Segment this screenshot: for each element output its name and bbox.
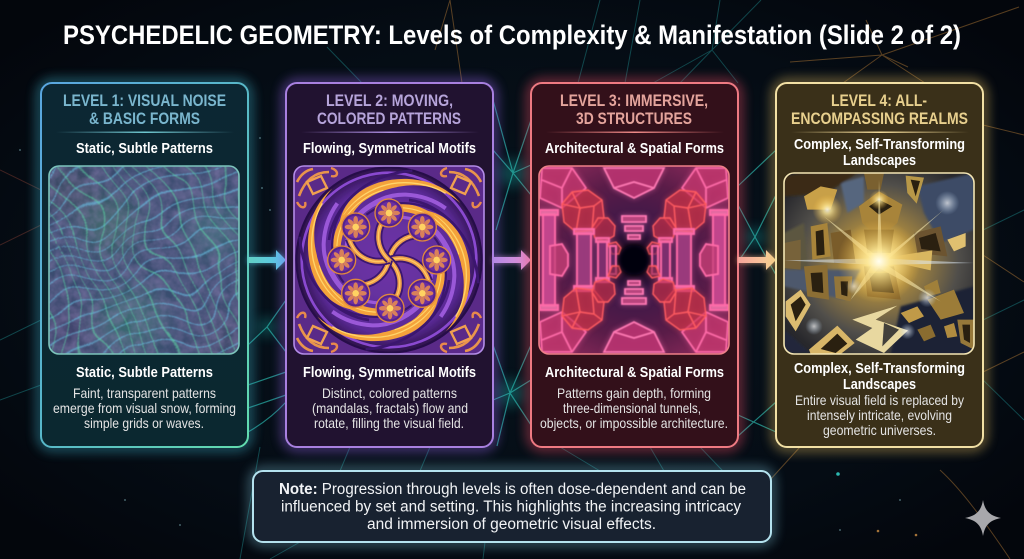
level 4 subheading: Landscapes bbox=[843, 153, 916, 169]
level 3 description: objects, or impossible architecture. bbox=[540, 416, 728, 431]
level 4 heading bbox=[791, 92, 968, 128]
note text: and immersion of geometric visual effects. bbox=[367, 516, 656, 533]
level 2 heading: COLORED PATTERNS bbox=[317, 110, 461, 128]
level 1 heading bbox=[63, 92, 226, 128]
level 1 description: Faint, transparent patterns bbox=[73, 386, 216, 401]
level 1 subheading: Static, Subtle Patterns bbox=[76, 141, 213, 157]
level 1 caption heading: Static, Subtle Patterns bbox=[76, 365, 213, 381]
arrow: level 3 to level 4 bbox=[738, 250, 776, 270]
level 1 description: simple grids or waves. bbox=[84, 416, 204, 431]
level 1 description bbox=[53, 386, 236, 431]
level 2 description: (mandalas, fractals) flow and bbox=[312, 401, 468, 416]
level 2 heading bbox=[317, 92, 461, 128]
level 4 description: intensely intricate, evolving bbox=[807, 408, 952, 423]
level 1 heading: & BASIC FORMS bbox=[89, 110, 200, 128]
level 2 description: Distinct, colored patterns bbox=[322, 386, 457, 401]
level 4 subheading: Complex, Self-Transforming bbox=[794, 137, 965, 153]
arrow: level 1 to level 2 bbox=[248, 250, 286, 270]
level 2 subheading: Flowing, Symmetrical Motifs bbox=[303, 141, 476, 157]
level 4 subheading bbox=[794, 137, 965, 169]
icon: sparkle watermark bbox=[965, 500, 1001, 536]
note text bbox=[279, 481, 746, 533]
level 3 description bbox=[540, 386, 728, 431]
note text: influenced by set and setting. This highlights the increasing intricacy bbox=[281, 498, 741, 516]
level 4 caption heading bbox=[794, 361, 965, 393]
level 4 description bbox=[795, 393, 964, 438]
panel: level 2 bbox=[286, 83, 493, 447]
panel: level 4 bbox=[776, 83, 983, 447]
level 4 description: Entire visual field is replaced by bbox=[795, 393, 964, 408]
level 4 heading: ENCOMPASSING REALMS bbox=[791, 110, 968, 128]
level 2 description: rotate, filling the visual field. bbox=[314, 416, 464, 431]
level 4 heading: LEVEL 4: ALL- bbox=[831, 92, 927, 110]
level 3 description: Patterns gain depth, forming bbox=[557, 386, 711, 401]
level 4 description: geometric universes. bbox=[823, 423, 936, 438]
arrow: level 2 to level 3 bbox=[493, 250, 531, 270]
level 4 caption heading: Complex, Self-Transforming bbox=[794, 361, 965, 377]
level 1 heading: LEVEL 1: VISUAL NOISE bbox=[63, 92, 226, 110]
level 2 description bbox=[312, 386, 468, 431]
panel: level 3 bbox=[531, 83, 738, 447]
level 3 image: neon 3D tunnel bbox=[539, 166, 729, 354]
level 4 image: golden fractal realm bbox=[784, 173, 974, 354]
level 1 description: emerge from visual snow, forming bbox=[53, 401, 236, 416]
level 2 image: swirling mandala bbox=[294, 166, 484, 354]
level 3 heading bbox=[560, 92, 708, 128]
level 1 image: faint grid waves bbox=[50, 166, 238, 354]
level 3 description: three-dimensional tunnels, bbox=[563, 401, 701, 416]
callout: note bbox=[253, 471, 771, 542]
level 4 caption heading: Landscapes bbox=[843, 377, 916, 393]
level 3 heading: LEVEL 3: IMMERSIVE, bbox=[560, 92, 708, 110]
panel: level 1 bbox=[29, 71, 260, 459]
note text: Note: Progression through levels is often dose-dependent and can be bbox=[279, 481, 746, 498]
level 3 caption heading: Architectural & Spatial Forms bbox=[545, 365, 724, 381]
level 3 heading: 3D STRUCTURES bbox=[576, 110, 692, 128]
level 2 caption heading: Flowing, Symmetrical Motifs bbox=[303, 365, 476, 381]
level 2 heading: LEVEL 2: MOVING, bbox=[326, 92, 453, 110]
level 3 subheading: Architectural & Spatial Forms bbox=[545, 141, 724, 157]
